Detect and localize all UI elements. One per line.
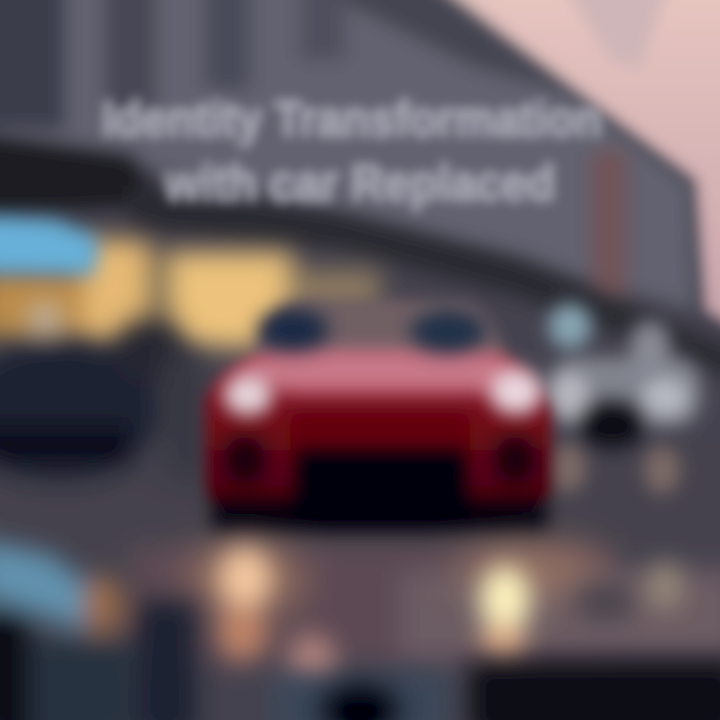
- title text, blurred and unreadable in the reference: [102, 91, 602, 211]
- grille and shadows: [212, 436, 548, 532]
- red sports car: [205, 300, 552, 532]
- building facade: [0, 0, 695, 310]
- shop windows: [0, 240, 380, 347]
- ground: [0, 450, 720, 665]
- title text, blurred and unreadable in the reference: Identity Transformation: [102, 91, 602, 147]
- dark canopy band: [0, 135, 720, 382]
- right white car: [548, 304, 700, 494]
- wet road reflections: [185, 544, 683, 690]
- windshield: [257, 308, 486, 354]
- hood: [232, 350, 525, 454]
- foreground dark figures: [0, 540, 720, 720]
- left dark car: [0, 304, 205, 480]
- blue sign: [0, 216, 98, 274]
- title text, blurred and unreadable in the reference: with car Replaced: [164, 155, 555, 211]
- headlights: [224, 370, 542, 415]
- sky: pink haze: [420, 0, 720, 330]
